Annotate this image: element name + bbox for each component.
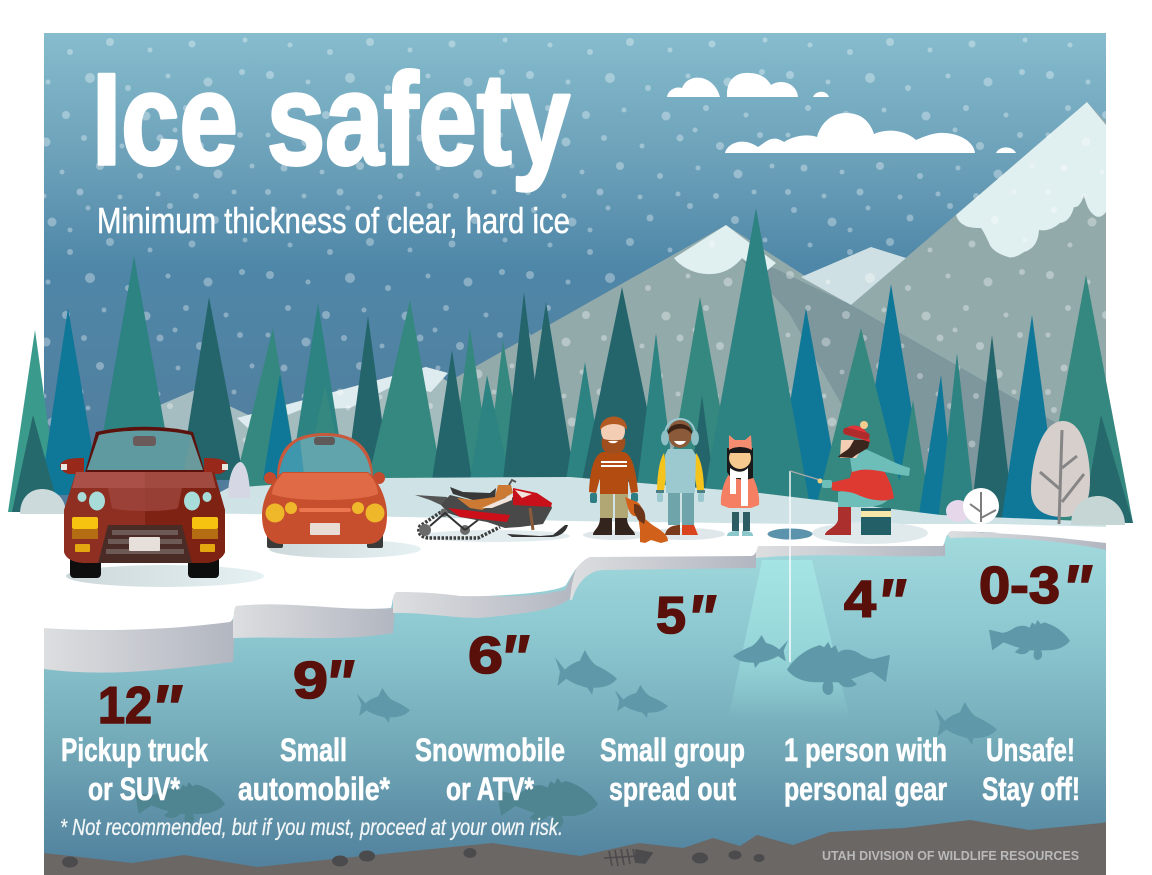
fishing line (789, 471, 791, 662)
label: 6 inches snowmobile: 6 (468, 627, 503, 685)
ice shelf side faces (44, 530, 1106, 673)
shadows on the ice (66, 522, 928, 587)
label: 9 inches small automobile: ″ (326, 647, 354, 719)
forest of pine trees (8, 208, 1133, 523)
clouds (667, 73, 1016, 153)
label: 0-3 inches unsafe: ″ (1063, 552, 1092, 624)
label: 4 inches one person: personal gear (784, 771, 947, 807)
water under the ice (44, 535, 1106, 875)
label: 0-3 inches unsafe: Stay off! (982, 771, 1080, 807)
pale distant snow bank (205, 477, 1106, 530)
panel: night sky background (44, 33, 1106, 533)
lake bed with stones (44, 820, 1106, 875)
label: 12 inches pickup truck (61, 672, 208, 807)
snowfall dots (44, 33, 1106, 523)
people group (589, 416, 759, 543)
person: bearded man (589, 416, 638, 535)
label: 6 inches snowmobile: ″ (501, 622, 529, 694)
snowmobile (415, 480, 568, 538)
icon: fish skeleton (604, 849, 652, 866)
small automobile (262, 433, 387, 548)
label: 9 inches small automobile: 9 (293, 652, 328, 710)
icon: orange dog (625, 497, 668, 543)
panel: mountains (160, 102, 1106, 530)
mountain snow caps (674, 102, 1106, 305)
label: 12 inches pickup truck: ″ (152, 672, 182, 744)
subtitle: Minimum thickness of clear, hard ice (97, 200, 570, 241)
label: 4 inches one person (784, 566, 947, 807)
label: 5 inches small group: spread out (609, 771, 736, 807)
label: 12 inches pickup truck: 12 (98, 677, 152, 735)
person: girl in pink coat (721, 435, 759, 536)
light beam under the ice hole (728, 560, 850, 720)
label: 5 inches small group: Small group (600, 732, 745, 768)
label: 6 inches snowmobile: Snowmobile (415, 732, 565, 768)
credit line: UTAH DIVISION OF WILDLIFE RESOURCES (822, 848, 1079, 863)
label: 4 inches one person: 1 person with (784, 732, 947, 768)
person: woman with earmuffs (656, 419, 705, 535)
label: 5 inches small group: 5 (656, 587, 686, 645)
label: 0-3 inches unsafe: Unsafe! (986, 732, 1075, 768)
label: 9 inches small automobile: automobile* (238, 771, 390, 807)
white ice sheet (0, 513, 1106, 630)
label: 9 inches small automobile (238, 647, 390, 807)
pickup truck (60, 427, 228, 578)
label: 5 inches small group: ″ (688, 582, 716, 654)
label: 4 inches one person: ″ (878, 566, 906, 638)
label: 6 inches snowmobile: or ATV* (446, 771, 534, 807)
label: 5 inches small group (600, 582, 745, 807)
title: Ice safety (92, 46, 570, 192)
ice fishing hole (768, 528, 812, 540)
label: 0-3 inches unsafe (979, 552, 1092, 807)
label: 6 inches snowmobile (415, 622, 565, 807)
label: 0-3 inches unsafe: 0-3 (979, 557, 1060, 615)
label: 12 inches pickup truck: Pickup truck (61, 732, 208, 768)
label: 12 inches pickup truck: or SUV* (88, 771, 180, 807)
footnote: * Not recommended, but if you must, proceed at your own risk. (60, 814, 563, 840)
fish silhouettes (135, 620, 1070, 828)
label: 9 inches small automobile: Small (280, 732, 347, 768)
label: 4 inches one person: 4 (844, 571, 876, 629)
bushes and winter trees (20, 421, 1125, 525)
person: ice fisherman (790, 421, 910, 535)
